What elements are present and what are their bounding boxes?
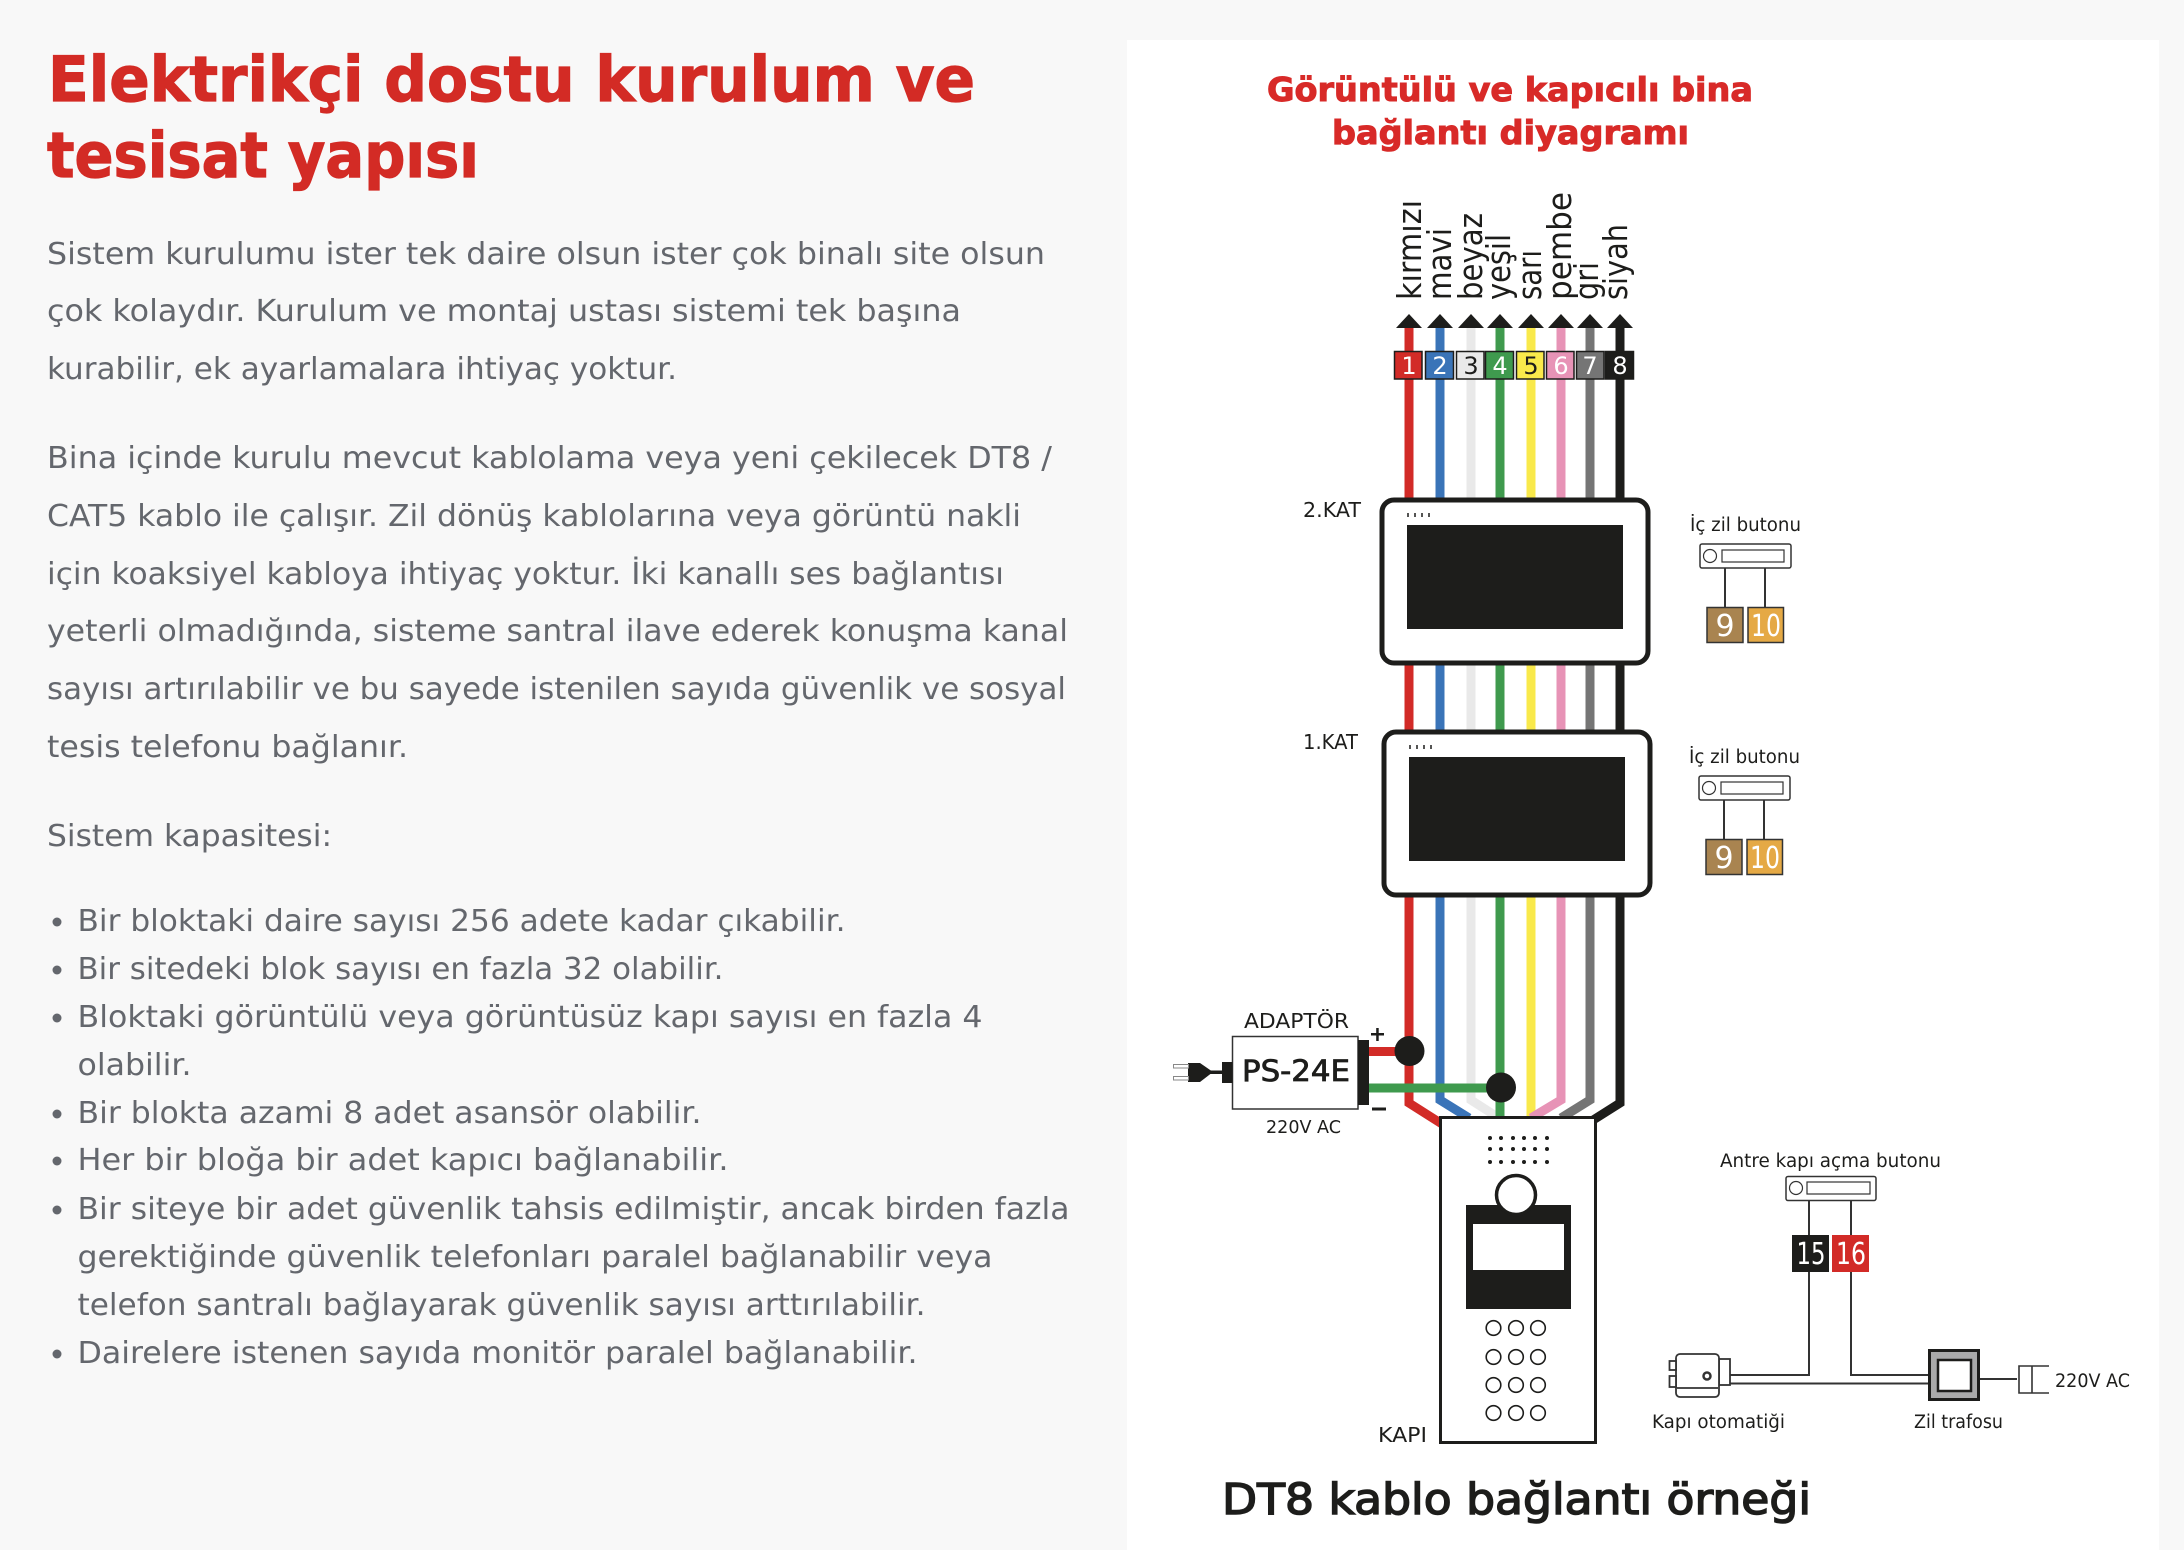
indoor bell button: floor 2: İç zil butonu <box>1690 515 1801 536</box>
bullet list: Bir sitedeki blok sayısı en fazla 32 olabilir. <box>78 952 724 987</box>
numbered wire terminals 1 to 8: 5 <box>1523 352 1539 380</box>
wire color labels: yeşil <box>1479 234 1518 300</box>
terminals 15 and 16: 16 <box>1836 1237 1866 1272</box>
numbered wire terminals 1 to 8: 1 <box>1401 352 1417 380</box>
diagram title: bağlantı diyagramı <box>1332 113 1689 152</box>
subheading: system capacity: Sistem kapasitesi: <box>47 819 332 854</box>
numbered wire terminals 1 to 8: 4 <box>1492 352 1508 380</box>
numbered wire terminals 1 to 8: 7 <box>1582 352 1598 380</box>
door lock icon <box>1670 1354 1730 1397</box>
bullet list: telefon santralı bağlayarak güvenlik sayısı arttırılabilir. <box>78 1288 926 1323</box>
panel: connection diagram <box>1127 40 2159 1550</box>
paragraph: installation: çok kolaydır. Kurulum ve montaj ustası sistemi tek başına <box>47 294 961 329</box>
paragraph: cabling: tesis telefonu bağlanır. <box>47 730 408 765</box>
diagram title: Görüntülü ve kapıcılı bina <box>1267 70 1753 109</box>
wire color labels <box>1390 192 1635 300</box>
entrance door release button: Antre kapı açma butonu <box>1720 1151 1941 1172</box>
wire color labels: kırmızı <box>1390 200 1429 300</box>
negative connection: green wire and node <box>1369 1072 1516 1102</box>
indoor bell button: floor 2: 10 <box>1751 609 1781 644</box>
numbered wire terminals 1 to 8: 2 <box>1432 352 1448 380</box>
wire arrowheads <box>1396 314 1633 328</box>
terminals 15 and 16 <box>1792 1235 1869 1272</box>
main heading: Elektrikçi dostu kurulum ve <box>48 43 975 116</box>
transformer label: Zil trafosu <box>1914 1412 2003 1433</box>
bullet list: Bir bloktaki daire sayısı 256 adete kadar çıkabilir. <box>78 904 845 939</box>
bell transformer icon <box>1930 1350 1978 1400</box>
indoor bell button: floor 2 <box>1690 515 1801 644</box>
power plug <box>1174 1062 1232 1083</box>
diagram title <box>1267 70 1753 152</box>
bullet list: Bloktaki görüntülü veya görüntüsüz kapı sayısı en fazla 4 <box>78 1000 982 1035</box>
bullet list: Dairelere istenen sayıda monitör paralel bağlanabilir. <box>78 1336 918 1371</box>
paragraph: cabling: CAT5 kablo ile çalışır. Zil dönüş kablolarına veya görüntü nakli <box>47 499 1021 534</box>
speaker grille <box>1488 1136 1549 1164</box>
wire color labels: siyah <box>1596 224 1635 300</box>
wire color labels: beyaz <box>1451 213 1490 300</box>
left text column <box>47 43 1070 1371</box>
power adapter PS-24E <box>1232 1009 1386 1138</box>
diagram caption: DT8 kablo bağlantı örneği <box>1222 1475 1811 1525</box>
positive connection: red wire and node <box>1369 1036 1424 1066</box>
indoor bell button: floor 1: İç zil butonu <box>1689 747 1800 768</box>
keypad <box>1486 1321 1545 1420</box>
door lock and transformer wiring <box>1730 1200 2017 1384</box>
paragraph: installation: kurabilir, ek ayarlamalara ihtiyaç yoktur. <box>47 352 677 387</box>
paragraph: cabling: için koaksiyel kabloya ihtiyaç yoktur. İki kanallı ses bağlantısı <box>47 556 1004 592</box>
power adapter PS-24E: PS-24E <box>1242 1054 1350 1088</box>
indoor bell button: floor 1 <box>1689 747 1800 876</box>
paragraph: cabling: Bina içinde kurulu mevcut kablolama veya yeni çekilecek DT8 / <box>47 441 1053 476</box>
door entry panel <box>1440 1118 1596 1442</box>
bullet list: Bir blokta azami 8 adet asansör olabilir. <box>78 1096 702 1131</box>
bullet list: Her bir bloğa bir adet kapıcı bağlanabilir. <box>78 1143 728 1178</box>
numbered wire terminals 1 to 8: 6 <box>1553 352 1569 380</box>
main heading: tesisat yapısı <box>47 119 479 192</box>
power adapter PS-24E: ADAPTÖR <box>1244 1009 1349 1033</box>
bullet list: gerektiğinde güvenlik telefonları paralel bağlanabilir veya <box>78 1240 992 1275</box>
display block and camera <box>1466 1176 1571 1309</box>
entrance door release button <box>1720 1151 1941 1200</box>
paragraph: cabling <box>47 441 1068 765</box>
door label: KAPI <box>1378 1423 1427 1447</box>
indoor bell button: floor 1: 9 <box>1714 841 1734 876</box>
wire color labels: mavi <box>1420 228 1459 300</box>
indoor bell button: floor 1: 10 <box>1750 841 1780 876</box>
main heading <box>47 43 975 192</box>
power adapter PS-24E: 220V AC <box>1266 1117 1341 1138</box>
eight colored wires <box>1409 326 1620 1124</box>
paragraph: installation <box>47 237 1045 387</box>
paragraph: cabling: sayısı artırılabilir ve bu sayede istenilen sayıda güvenlik ve sosyal <box>47 672 1066 707</box>
door lock label: Kapı otomatiği <box>1652 1412 1785 1433</box>
bullet list: Bir siteye bir adet güvenlik tahsis edilmiştir, ancak birden fazla <box>78 1192 1070 1227</box>
numbered wire terminals 1 to 8: 3 <box>1463 352 1479 380</box>
wire color labels: pembe <box>1540 192 1579 300</box>
monitor: floor 2 <box>1382 500 1648 663</box>
floor label: 2.KAT: 2.KAT <box>1303 498 1362 522</box>
paragraph: installation: Sistem kurulumu ister tek daire olsun ister çok binalı site olsun <box>47 237 1045 272</box>
paragraph: cabling: yeterli olmadığında, sisteme santral ilave ederek konuşma kanal <box>47 614 1068 649</box>
mains connector <box>2019 1366 2049 1393</box>
wire color labels: gri <box>1567 262 1606 300</box>
wire color labels: sarı <box>1510 250 1549 300</box>
terminals 15 and 16: 15 <box>1796 1237 1826 1272</box>
numbered wire terminals 1 to 8: 8 <box>1612 352 1628 380</box>
numbered wire terminals 1 to 8 <box>1394 352 1634 380</box>
bullet list: olabilir. <box>78 1048 192 1083</box>
mains label: 220V AC <box>2055 1371 2130 1392</box>
indoor bell button: floor 2: 9 <box>1715 609 1735 644</box>
monitor: floor 1 <box>1384 732 1650 895</box>
floor label: 1.KAT: 1.KAT <box>1303 730 1359 754</box>
bullet list <box>52 904 1070 1371</box>
